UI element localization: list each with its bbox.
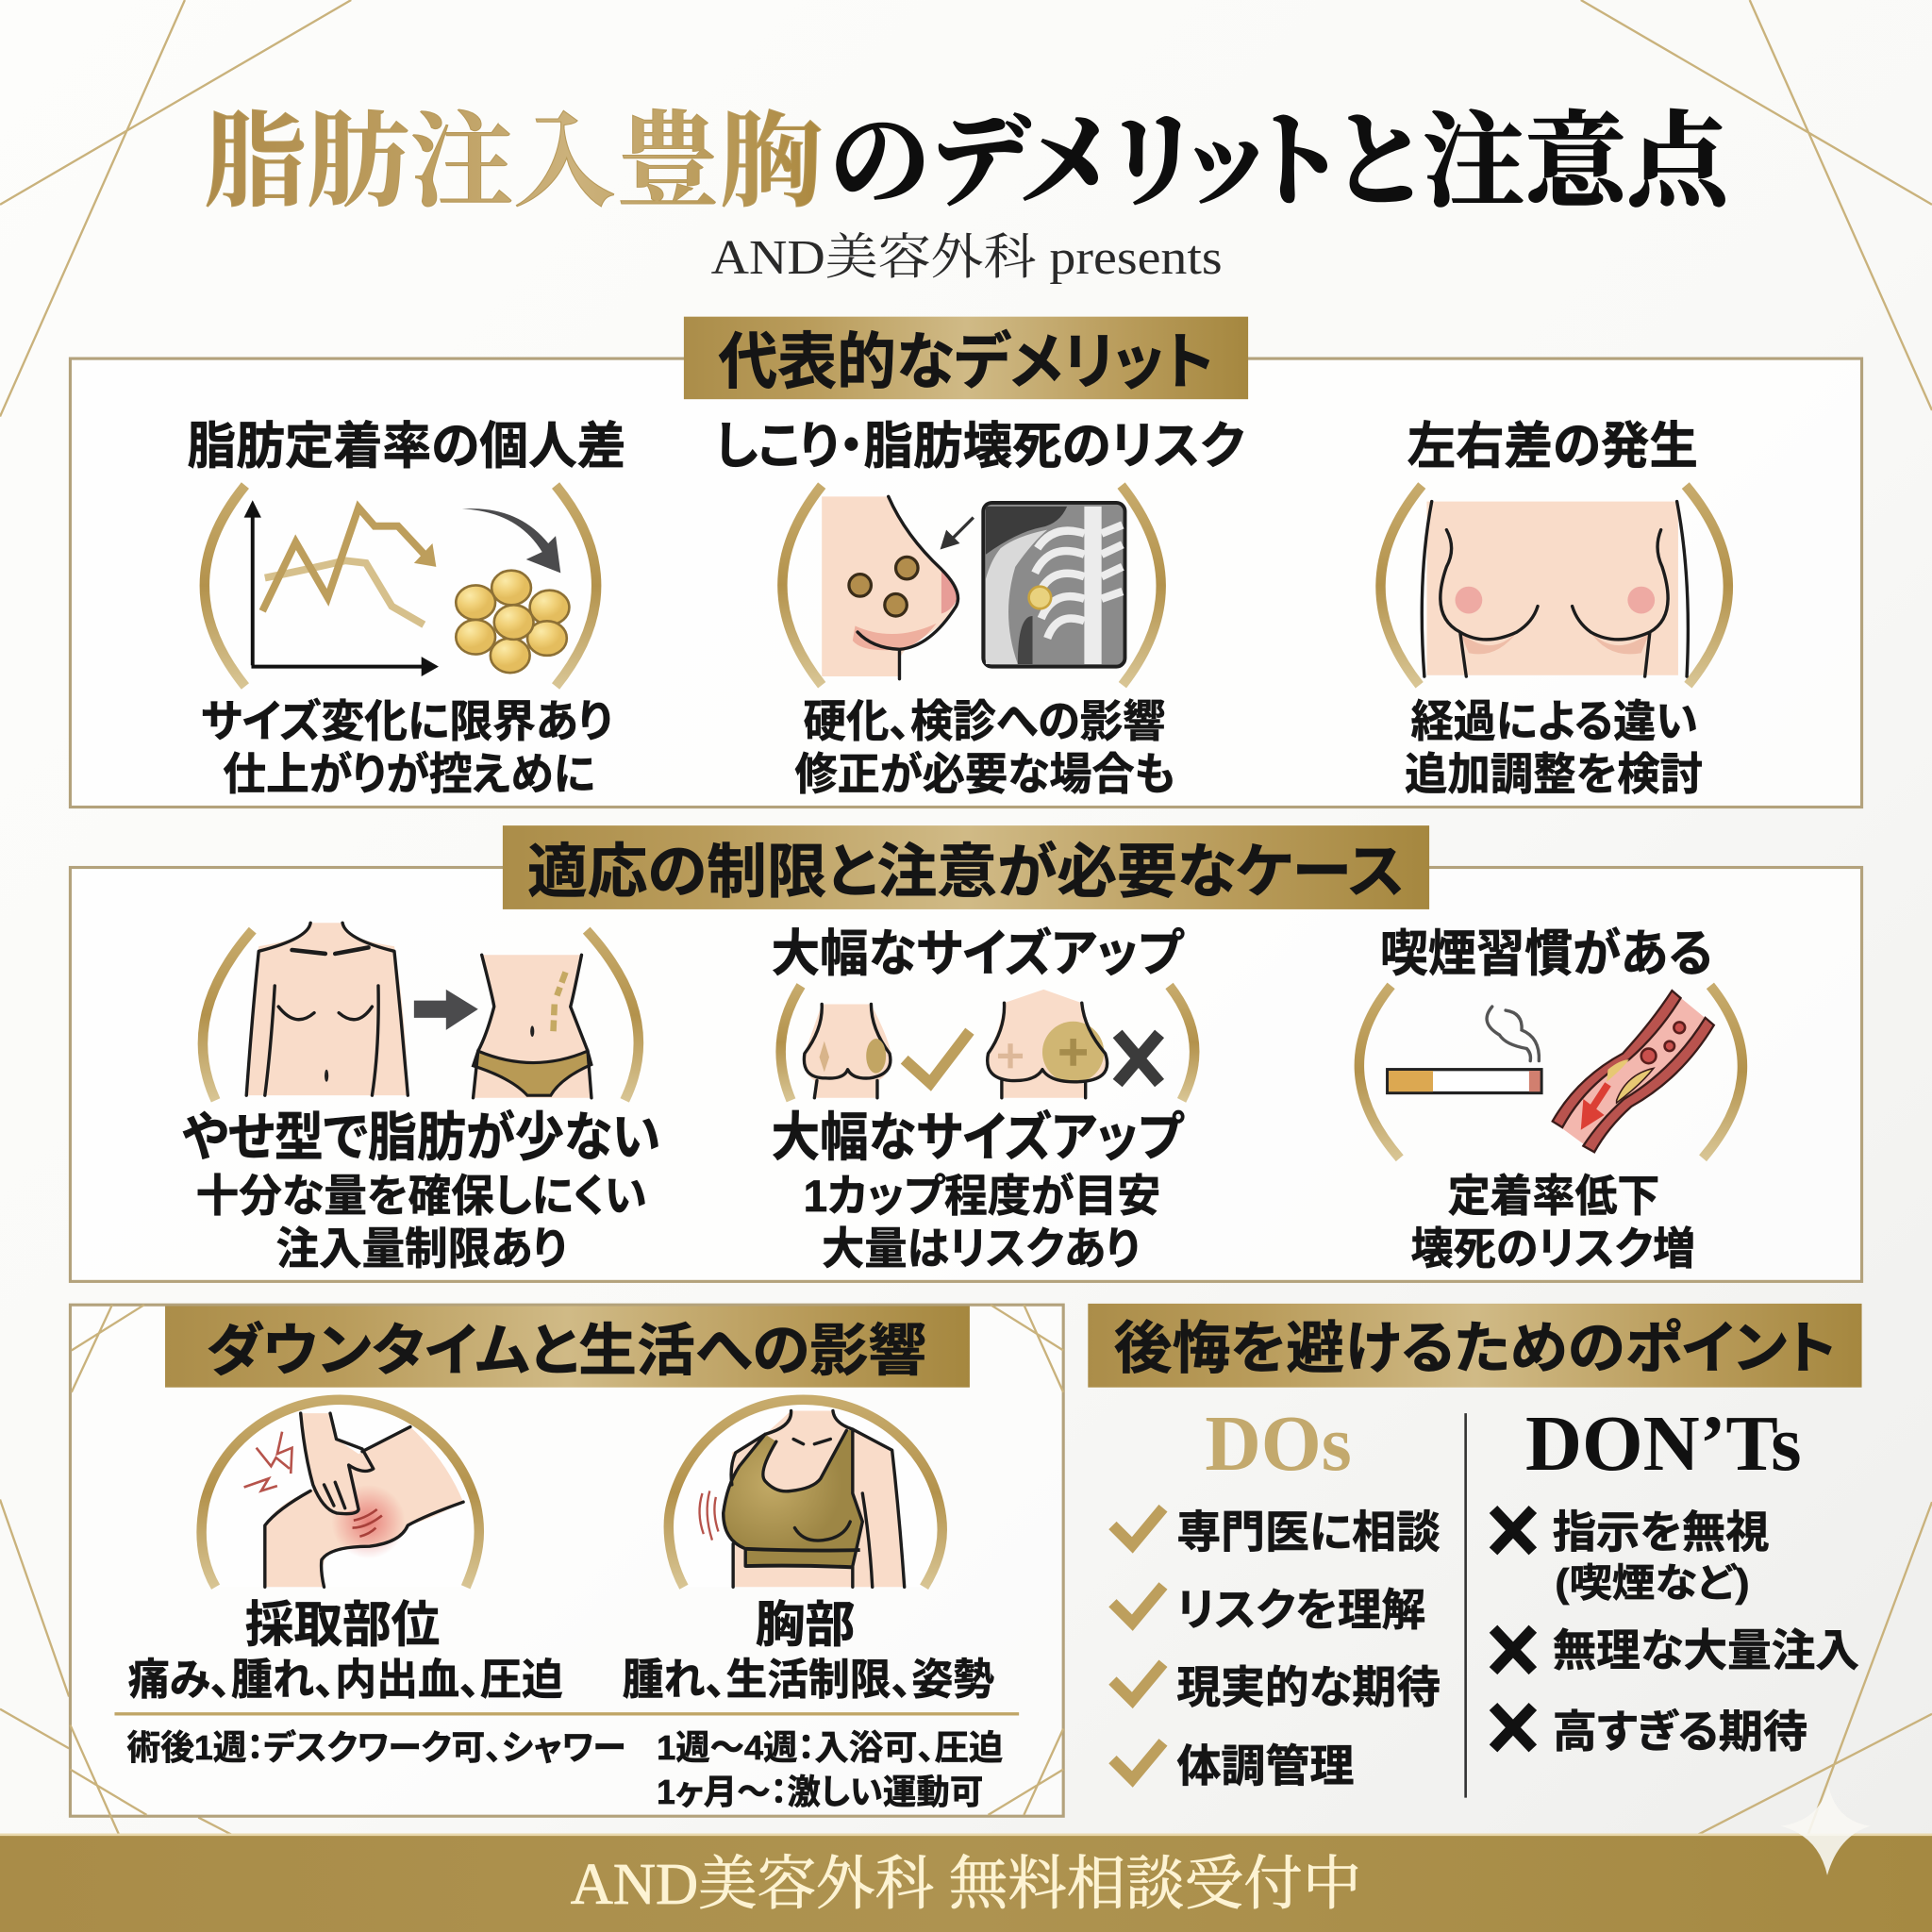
icon: size comparison with check and cross (781, 986, 1194, 1100)
column: large size increase: 大幅なサイズアップ (772, 1108, 1185, 1167)
heading: representative drawbacks: 代表的なデメリット (718, 327, 1214, 396)
panel: points to avoid regret (1088, 1304, 1862, 1798)
column: smoking habit: 壊死のリスク増 (1411, 1224, 1695, 1274)
title: 脂肪注入豊胸 (204, 105, 823, 220)
list: DOs: 専門医に相談 (1176, 1507, 1441, 1557)
column: slim body type: やせ型で脂肪が少ない (182, 1108, 660, 1167)
column: individual differences in fat retention: サイズ変化に限界あり (201, 696, 612, 746)
column: donor site (128, 1400, 563, 1704)
list: DON'Ts: DON’Ts (1525, 1401, 1802, 1488)
heading: downtime: ダウンタイムと生活への影響 (206, 1319, 926, 1382)
list: DON'Ts: (喫煙など) (1555, 1561, 1750, 1606)
subtitle: AND美容外科 presents (711, 230, 1223, 285)
recovery timeline: 1ヶ月〜：激しい運動可 (657, 1773, 983, 1811)
column: lumps and fat necrosis (715, 419, 1244, 799)
list: DOs (1112, 1401, 1441, 1791)
list: DON'Ts: 指示を無視 (1553, 1507, 1770, 1557)
heading: points (1088, 1304, 1862, 1388)
list: DON'Ts: 無理な大量注入 (1553, 1625, 1859, 1675)
column: donor site: 痛み、腫れ、内出血、圧迫 (128, 1656, 563, 1704)
column: left-right asymmetry (1381, 419, 1728, 799)
column: slim body type: 十分な量を確保しにくい (196, 1171, 647, 1221)
list: DOs: 現実的な期待 (1176, 1662, 1441, 1712)
footer banner: AND美容外科 無料相談受付中 (571, 1851, 1361, 1917)
column: left-right asymmetry: 追加調整を検討 (1405, 749, 1703, 799)
column: large size increase (772, 926, 1194, 1274)
icon: torso and abdomen donor site (203, 923, 639, 1100)
column: smoking habit (1359, 926, 1742, 1274)
column: chest: 腫れ、生活制限、姿勢 (623, 1656, 994, 1704)
recovery timeline: 1週〜4週：入浴可、圧迫 (657, 1728, 1003, 1767)
icon: thigh pain (202, 1400, 479, 1587)
column: individual differences in fat retention: 脂肪定着率の個人差 (188, 419, 626, 475)
column: donor site: 採取部位 (245, 1598, 440, 1653)
recovery timeline (127, 1728, 1003, 1811)
panel: restrictions and cautionary cases (70, 825, 1862, 1281)
column: slim body type (182, 923, 660, 1274)
list: DOs: 体調管理 (1176, 1741, 1354, 1791)
title (204, 105, 1735, 220)
icon: woman in compression bra (669, 1400, 942, 1587)
list: DOs: リスクを理解 (1176, 1585, 1425, 1635)
column: chest (623, 1400, 994, 1704)
icon: asymmetrical chest (1381, 486, 1728, 685)
panel: downtime and lifestyle impact (70, 1305, 1063, 1836)
heading: downtime (165, 1306, 970, 1388)
heading: points: 後悔を避けるためのポイント (1114, 1317, 1836, 1380)
icon: cigarette and narrowed vessel (1359, 986, 1742, 1158)
column: individual differences in fat retention (188, 419, 626, 799)
panel: representative drawbacks (70, 317, 1862, 808)
title: のデメリットと注意点 (828, 105, 1735, 220)
column: large size increase: 1カップ程度が目安 (804, 1171, 1160, 1221)
icon: declining chart and fat cells (205, 486, 596, 687)
column: individual differences in fat retention: 仕上がりが控えめに (223, 749, 595, 799)
column: smoking habit: 定着率低下 (1448, 1171, 1659, 1221)
list: DON'Ts (1493, 1401, 1859, 1757)
list: DON'Ts: 高すぎる期待 (1553, 1707, 1807, 1757)
column: large size increase: 大量はリスクあり (822, 1224, 1140, 1274)
column: large size increase: 大幅なサイズアップ (772, 926, 1185, 982)
column: smoking habit: 喫煙習慣がある (1380, 926, 1713, 982)
column: left-right asymmetry: 経過による違い (1411, 696, 1698, 746)
footer banner (0, 1834, 1932, 1932)
column: left-right asymmetry: 左右差の発生 (1407, 419, 1698, 475)
list: DOs: DOs (1205, 1401, 1352, 1488)
heading: restrictions: 適応の制限と注意が必要なケース (527, 840, 1405, 906)
column: lumps and fat necrosis: 硬化、検診への影響 (804, 696, 1166, 746)
column: chest: 胸部 (756, 1598, 855, 1653)
column: lumps and fat necrosis: しこり・脂肪壊死のリスク (715, 419, 1244, 475)
column: lumps and fat necrosis: 修正が必要な場合も (794, 749, 1175, 799)
sparkle (1780, 1786, 1871, 1875)
column: slim body type: 注入量制限あり (276, 1224, 567, 1274)
icon: breast with lumps and x-ray (782, 486, 1161, 685)
recovery timeline: 術後1週：デスクワーク可、シャワー (127, 1728, 626, 1767)
